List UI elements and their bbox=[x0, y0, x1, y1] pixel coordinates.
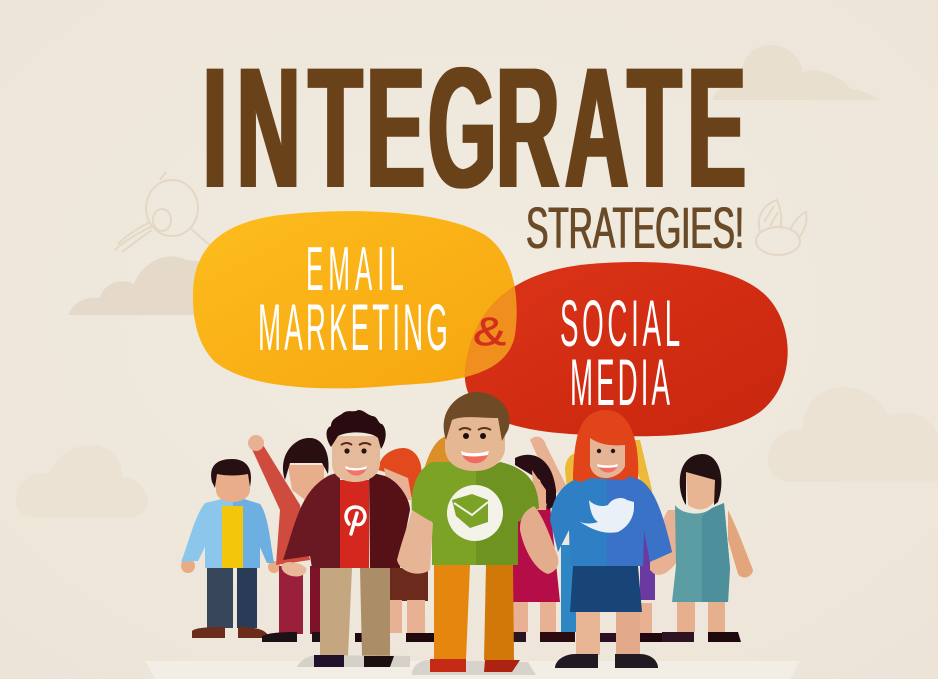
speech bubbles bbox=[193, 211, 788, 436]
crowd of people bbox=[181, 392, 753, 675]
shoe shadows bbox=[297, 655, 410, 667]
cloud: top right bbox=[712, 45, 880, 100]
floor bbox=[145, 661, 800, 679]
bubble: social media bbox=[465, 262, 788, 436]
bird sketch: left bbox=[115, 172, 213, 252]
bubble overlap bbox=[465, 286, 517, 377]
title: INTEGRATE bbox=[203, 31, 746, 224]
ampersand: & bbox=[473, 310, 506, 354]
text: email: EMAIL bbox=[306, 235, 404, 304]
person: man with green shirt bbox=[397, 392, 558, 675]
person: woman in magenta dress bbox=[510, 437, 575, 642]
person: woman in teal dress bbox=[652, 454, 753, 642]
person: man in red raising arm bbox=[248, 435, 330, 642]
bubble: email marketing bbox=[193, 211, 517, 388]
cloud: bottom right bbox=[768, 387, 938, 482]
icon: email envelope in circle bbox=[447, 485, 503, 541]
person: man in light blue jacket bbox=[181, 459, 280, 638]
text: media: MEDIA bbox=[570, 345, 670, 419]
person: man with Pinterest shirt bbox=[282, 410, 410, 667]
bird sketch: right bbox=[756, 200, 807, 255]
cloud: bottom left bbox=[16, 445, 148, 517]
person: red haired woman behind bbox=[355, 448, 437, 642]
icon: Pinterest logo bbox=[346, 507, 365, 534]
subtitle: STRATEGIES! bbox=[526, 197, 744, 261]
cloud: left middle bbox=[68, 256, 205, 315]
text: social: SOCIAL bbox=[560, 286, 680, 360]
person: yellow haired woman behind bbox=[424, 436, 664, 642]
text: marketing: MARKETING bbox=[258, 290, 448, 364]
person: woman with Twitter sweater bbox=[550, 410, 672, 668]
